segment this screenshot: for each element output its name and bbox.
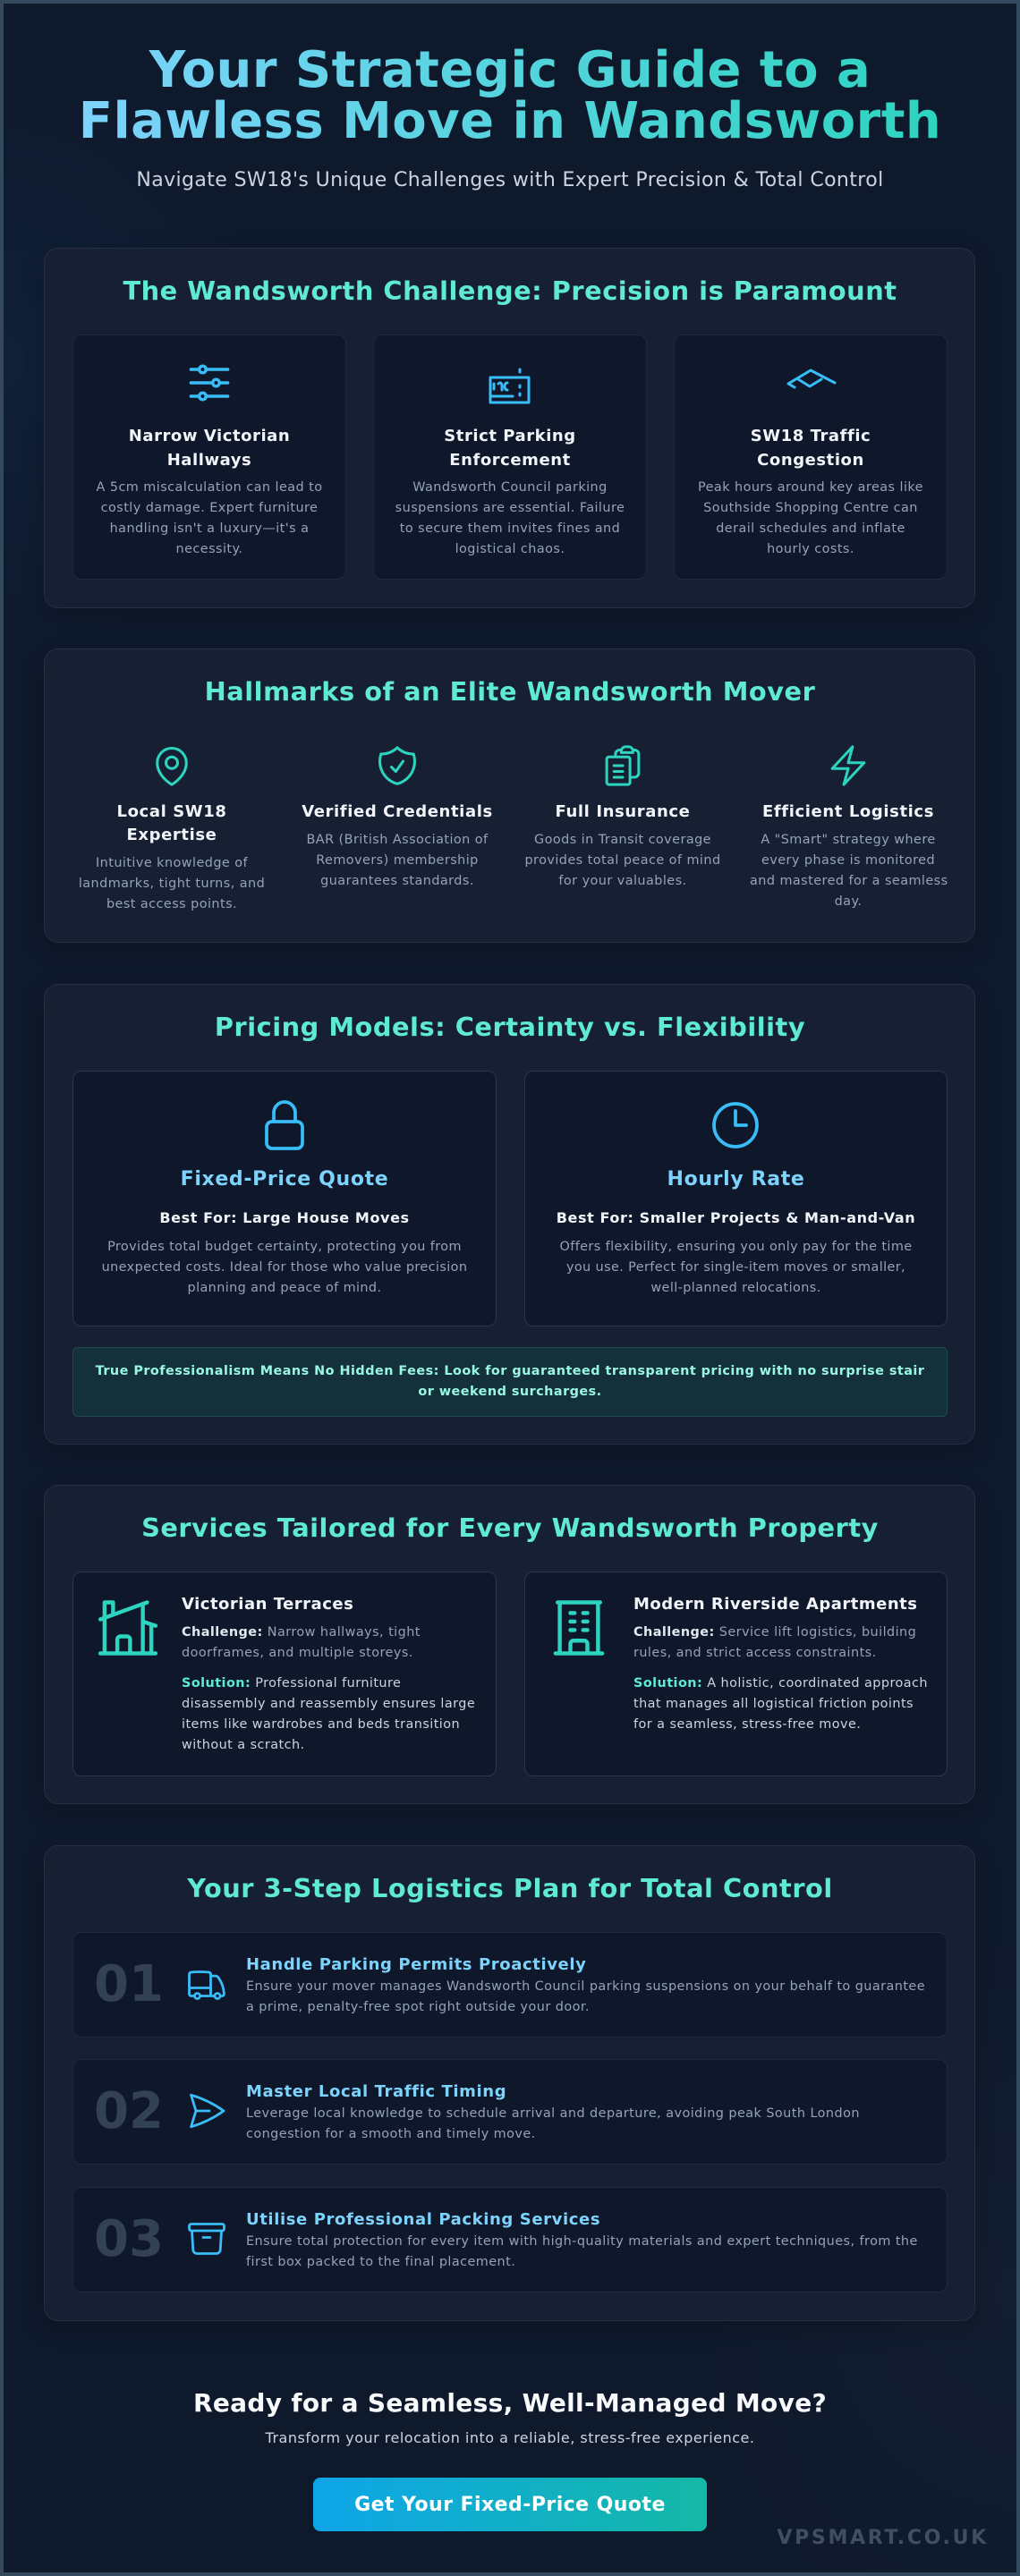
- heading: hallmarks: Hallmarks of an Elite Wandsworth Mover: [205, 676, 815, 707]
- callout: no hidden fees: True Professionalism Means No Hidden Fees: Look for guaranteed transparent pricing with no surprise stair: [96, 1364, 924, 1378]
- step number: 01: [94, 1955, 164, 2013]
- card text: suspensions are essential. Failure: [395, 501, 625, 515]
- challenge text: rules, and strict access constraints.: [633, 1646, 877, 1660]
- pricing text: well-planned relocations.: [650, 1281, 821, 1295]
- solution text: items like wardrobes and beds transition: [182, 1717, 460, 1732]
- icon: map pin: [156, 747, 188, 786]
- solution text: [633, 1676, 928, 1732]
- hallmark text: A "Smart" strategy where: [761, 833, 936, 847]
- card: modern riverside apartments: [524, 1572, 948, 1776]
- hallmark: efficient logistics: [750, 745, 948, 909]
- hallmark text: provides total peace of mind: [524, 853, 721, 868]
- card title: Strict Parking: [444, 427, 576, 445]
- heading: pricing models: Pricing Models: Certainty vs. Flexibility: [215, 1012, 805, 1042]
- step text: a prime, penalty-free spot right outside your door.: [246, 2000, 590, 2014]
- service title: Modern Riverside Apartments: [633, 1594, 917, 1614]
- card: hourly rate: [524, 1071, 948, 1326]
- icon: shield check: [378, 746, 416, 785]
- hallmark text: BAR (British Association of: [306, 833, 489, 847]
- challenge text: [182, 1625, 421, 1660]
- card title: Enforcement: [449, 451, 571, 470]
- panel: services: [44, 1485, 975, 1804]
- hallmark text: every phase is monitored: [761, 853, 935, 868]
- card text: handling isn't a luxury—it's a: [110, 521, 309, 536]
- hallmark text: Removers) membership: [316, 853, 479, 868]
- solution text: [182, 1676, 475, 1752]
- service title: Victorian Terraces: [182, 1594, 353, 1614]
- card title: [129, 427, 290, 470]
- call to action text: Transform your relocation into a reliable, stress-free experience.: [266, 2429, 754, 2446]
- icon: road junction: [786, 369, 837, 389]
- card text: hourly costs.: [767, 542, 854, 556]
- card text: Peak hours around key areas like: [698, 480, 923, 495]
- card title: Narrow Victorian: [129, 427, 290, 445]
- hallmark text: [524, 833, 721, 888]
- card text: derail schedules and inflate: [716, 521, 905, 536]
- hallmark: verified credentials: [302, 746, 493, 888]
- step text: [246, 2234, 918, 2269]
- card text: costly damage. Expert furniture: [101, 501, 318, 515]
- solution text: for a seamless, stress-free move.: [633, 1717, 861, 1732]
- card: narrow Victorian hallways: [72, 335, 346, 580]
- card text: logistical chaos.: [455, 542, 565, 556]
- step text: [246, 2106, 860, 2141]
- icon: archive box: [188, 2223, 225, 2255]
- solution text: Solution: A holistic, coordinated approach: [633, 1676, 928, 1690]
- step text: Ensure total protection for every item with high-quality materials and expert techniques, from the: [246, 2234, 918, 2249]
- hallmark: local expertise: [79, 747, 265, 911]
- hallmark text: [750, 833, 948, 909]
- panel: hallmarks: [44, 648, 975, 943]
- icon: clipboard documents: [605, 745, 641, 786]
- solution text: disassembly and reassembly ensures large: [182, 1697, 475, 1711]
- hallmark text: guarantees standards.: [320, 874, 474, 888]
- title: Your Strategic Guide to a: [149, 41, 871, 99]
- step text: [246, 1979, 925, 2014]
- solution text: without a scratch.: [182, 1738, 305, 1752]
- card: fixed-price quote: [72, 1071, 497, 1326]
- card text: necessity.: [176, 542, 242, 556]
- icon: padlock: [265, 1100, 304, 1150]
- heading: services: Services Tailored for Every Wandsworth Property: [141, 1513, 879, 1543]
- hallmark title: Full Insurance: [555, 801, 690, 821]
- step number: 03: [94, 2210, 164, 2268]
- card text: [97, 480, 322, 556]
- hallmark text: Intuitive knowledge of: [96, 856, 248, 870]
- title: Flawless Move in Wandsworth: [79, 92, 941, 150]
- pricing text: unexpected costs. Ideal for those who value precision: [102, 1260, 467, 1275]
- watermark: VPSMART.CO.UK: [777, 2527, 989, 2549]
- button: [313, 2478, 707, 2531]
- step text: Ensure your mover manages Wandsworth Council parking suspensions on your behalf to guarantee: [246, 1979, 925, 1994]
- title: [79, 41, 941, 150]
- card text: A 5cm miscalculation can lead to: [97, 480, 322, 495]
- hallmark text: for your valuables.: [558, 874, 687, 888]
- pricing text: planning and peace of mind.: [188, 1281, 381, 1295]
- hallmark text: day.: [835, 894, 862, 909]
- icon: paper plane: [190, 2093, 225, 2129]
- icon: parking bay: [489, 369, 530, 404]
- callout: no hidden fees: [72, 1347, 948, 1417]
- icon: house: [98, 1600, 157, 1656]
- hallmark text: landmarks, tight turns, and: [79, 877, 265, 891]
- hallmark text: and mastered for a seamless: [750, 874, 948, 888]
- pricing title: Hourly Rate: [667, 1168, 804, 1191]
- hallmark text: Goods in Transit coverage: [534, 833, 711, 847]
- pricing text: [560, 1240, 913, 1295]
- pricing text: Provides total budget certainty, protecting you from: [107, 1240, 462, 1254]
- step text: Leverage local knowledge to schedule arrival and departure, avoiding peak South London: [246, 2106, 860, 2121]
- call to action heading: Ready for a Seamless, Well-Managed Move?: [193, 2388, 827, 2418]
- panel: logistics plan: [44, 1845, 975, 2321]
- step text: congestion for a smooth and timely move.: [246, 2127, 536, 2141]
- solution text: Solution: Professional furniture: [182, 1676, 401, 1690]
- card title: [444, 427, 576, 470]
- heading: logistics plan: Your 3-Step Logistics Plan for Total Control: [187, 1873, 833, 1903]
- card: SW18 traffic congestion: [674, 335, 948, 580]
- icon: sliders: [190, 365, 229, 401]
- step number: 02: [94, 2082, 164, 2140]
- icon: clock: [712, 1102, 759, 1148]
- step text: first box packed to the final placement.: [246, 2255, 515, 2269]
- hallmark title: Verified Credentials: [302, 801, 493, 821]
- icon: truck: [188, 1970, 225, 2000]
- step 2: [72, 2059, 948, 2165]
- hallmark title: [117, 801, 226, 844]
- icon: bolt: [830, 745, 866, 786]
- card title: SW18 Traffic: [751, 427, 871, 445]
- challenge text: [633, 1625, 916, 1660]
- best-for line: Best For: Large House Moves: [159, 1209, 410, 1226]
- card text: [698, 480, 923, 556]
- hallmark title: Efficient Logistics: [762, 801, 934, 821]
- callout: no hidden fees: or weekend surcharges.: [418, 1385, 602, 1399]
- card: Victorian terraces: [72, 1572, 497, 1776]
- pricing text: Offers flexibility, ensuring you only pay for the time: [560, 1240, 913, 1254]
- challenge text: Challenge: Narrow hallways, tight: [182, 1625, 421, 1640]
- card title: [751, 427, 871, 470]
- step 1: [72, 1932, 948, 2038]
- step 3: [72, 2187, 948, 2292]
- hallmark: full insurance: [524, 745, 721, 888]
- hallmark title: Local SW18: [117, 801, 226, 821]
- button: Get Your Fixed-Price Quote: [354, 2494, 666, 2516]
- hallmark title: Expertise: [127, 826, 217, 844]
- card text: Wandsworth Council parking: [412, 480, 608, 495]
- card text: Southside Shopping Centre can: [703, 501, 918, 515]
- challenge text: Challenge: Service lift logistics, building: [633, 1625, 916, 1640]
- pricing title: Fixed-Price Quote: [181, 1168, 388, 1191]
- card text: to secure them invites fines and: [400, 521, 620, 536]
- card title: Hallways: [167, 451, 251, 470]
- hallmark text: [306, 833, 489, 888]
- panel: the Wandsworth challenge: [44, 248, 975, 608]
- step title: Master Local Traffic Timing: [246, 2082, 506, 2101]
- solution text: that manages all logistical friction points: [633, 1697, 914, 1711]
- hallmark text: [79, 856, 265, 911]
- hallmark text: best access points.: [106, 897, 237, 911]
- challenge text: doorframes, and multiple storeys.: [182, 1646, 413, 1660]
- best-for line: Best For: Smaller Projects & Man-and-Van: [557, 1209, 915, 1226]
- card: strict parking enforcement: [373, 335, 647, 580]
- panel: pricing models: [44, 984, 975, 1445]
- pricing text: [102, 1240, 467, 1295]
- heading: the Wandsworth challenge: The Wandsworth Challenge: Precision is Paramount: [123, 275, 897, 306]
- step title: Utilise Professional Packing Services: [246, 2210, 600, 2229]
- card title: Congestion: [757, 451, 864, 470]
- icon: apartment building: [553, 1600, 605, 1656]
- step title: Handle Parking Permits Proactively: [246, 1955, 586, 1974]
- card text: [395, 480, 625, 556]
- subtitle: Navigate SW18's Unique Challenges with Expert Precision & Total Control: [136, 169, 884, 191]
- pricing text: you use. Perfect for single-item moves or smaller,: [566, 1260, 905, 1275]
